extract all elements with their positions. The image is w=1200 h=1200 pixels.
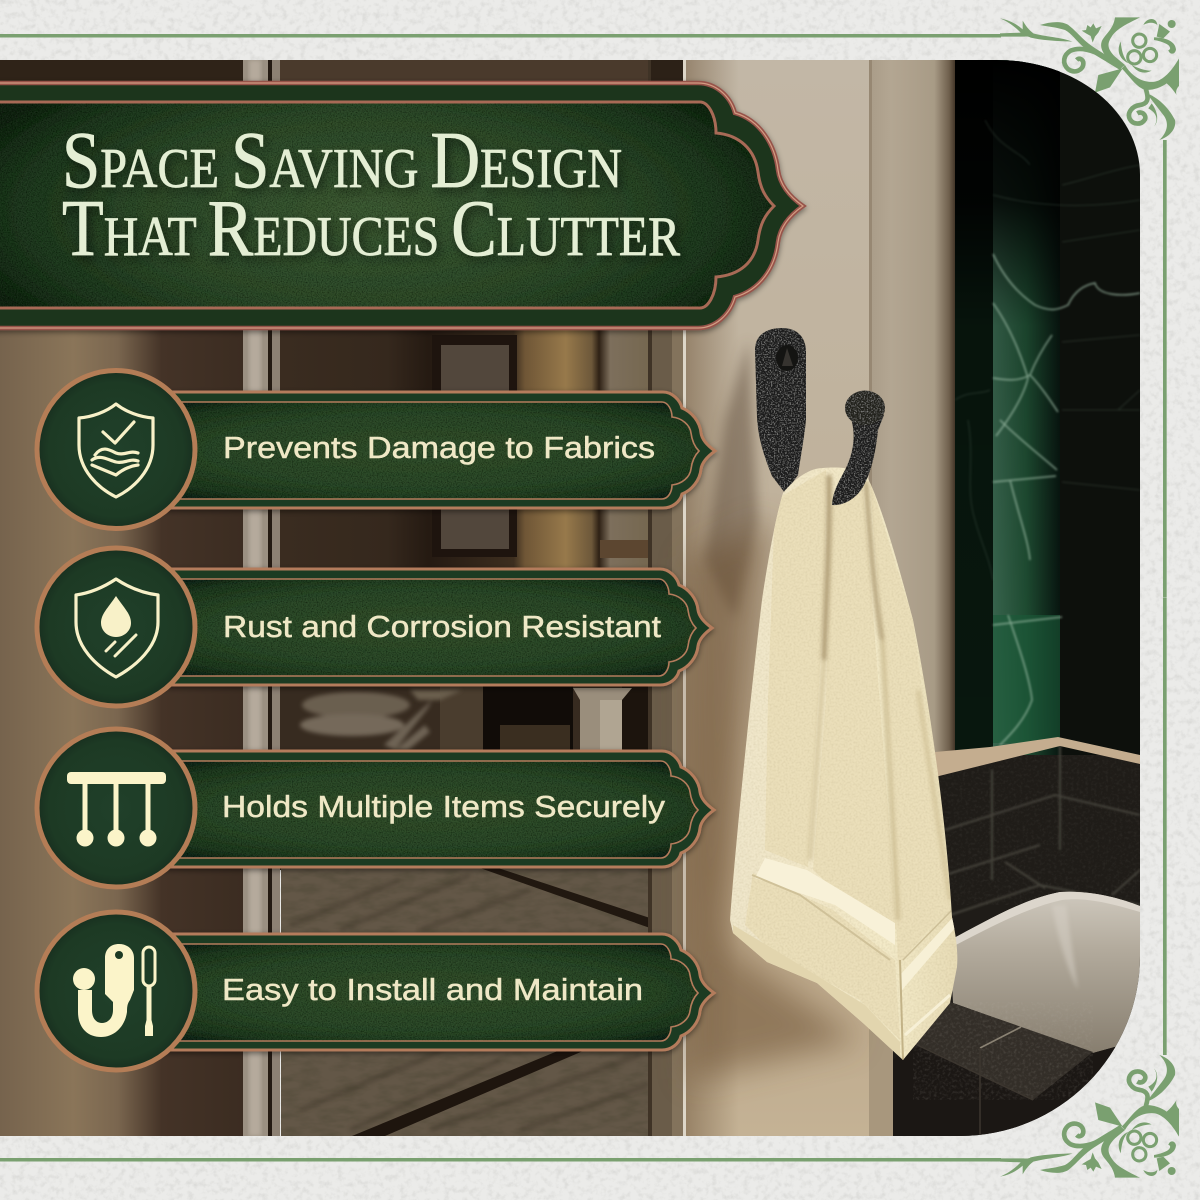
icon: shield with check and fabric (79, 404, 153, 497)
photo: dark tile wall (893, 745, 1140, 1136)
heading text: THAT REDUCES CLUTTER (62, 185, 681, 273)
feature row 1: prevents damage to fabrics (37, 370, 715, 528)
label 1: Prevents Damage to Fabrics (223, 430, 655, 465)
photo: tiled floor (281, 868, 651, 1136)
label 4: Easy to Install and Maintain (222, 972, 643, 1007)
heading banner (0, 83, 803, 328)
photo: door frame (648, 60, 685, 1136)
photo: framed picture (432, 335, 517, 557)
photo: bath tub (950, 892, 1140, 1053)
ribbon panel 1 (150, 392, 715, 508)
ribbon panel 3 (150, 751, 714, 867)
badge 1 (37, 370, 195, 528)
photo: pedestal sink (573, 688, 632, 750)
towel: fold shadows (810, 475, 950, 920)
ribbon panel 2 (150, 569, 712, 685)
label 2: Rust and Corrosion Resistant (223, 609, 661, 644)
photo: green marble pillar (955, 60, 1140, 760)
photo: dark recess (440, 686, 648, 750)
ribbon panel 4 (150, 934, 714, 1050)
photo: dark stone tub edge (913, 1002, 1116, 1136)
feature row 3: holds multiple items securely (37, 729, 714, 887)
banner outer shape (0, 83, 803, 328)
towel: terry panels (745, 470, 911, 1040)
banner inner panel (0, 102, 774, 308)
photo: second frame (600, 540, 650, 558)
photo: toilet (300, 690, 462, 750)
badge 2 (37, 548, 195, 706)
icon: wall hook plate (755, 328, 806, 493)
corner ornament: bottom right (1000, 598, 1179, 1178)
badge 3 (37, 729, 195, 887)
heading text (62, 117, 681, 273)
photo: shadow of hook (705, 340, 758, 620)
decorative frame top line (0, 34, 1001, 38)
heading text: SPACE SAVING DESIGN (62, 117, 622, 205)
icon: multi-hook rack (67, 772, 166, 846)
photo: grey column (243, 60, 280, 1136)
photo: cream wall (683, 60, 869, 1136)
photo: top room strip (280, 60, 651, 82)
photo: left wall (0, 330, 243, 1136)
feature row 2: rust and corrosion resistant (37, 548, 712, 706)
photo: shadow of towel (690, 520, 860, 1080)
photo: back room wall (280, 330, 648, 568)
photo: recessed wall (869, 60, 956, 1136)
feature row 4: easy to install and maintain (37, 912, 714, 1070)
badge 4 (37, 912, 195, 1070)
photo: tile ledge (935, 737, 1140, 777)
photo: upper dark band (0, 60, 243, 81)
towel (725, 465, 960, 1065)
icon: hook and screwdriver (73, 944, 155, 1037)
photo: dark green wall (1002, 60, 1140, 755)
photo: lower room (280, 685, 651, 870)
icon: hook arm and knob (832, 390, 885, 505)
decorative frame bottom line (0, 1158, 1001, 1162)
corner ornament: top right (1000, 17, 1179, 597)
label 3: Holds Multiple Items Securely (222, 789, 666, 824)
icon: shield with water drop (76, 579, 158, 677)
